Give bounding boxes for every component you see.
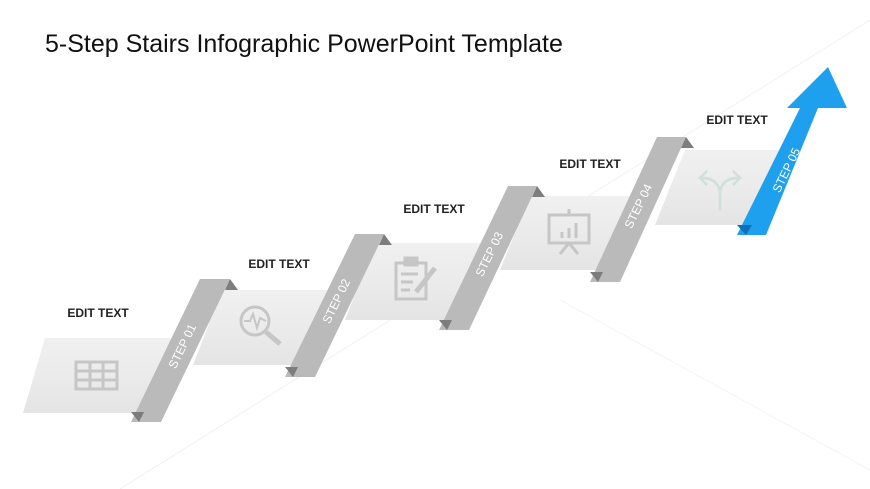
bar: step 02: STEP 02 xyxy=(320,276,353,326)
arrow: step 05: STEP 05 xyxy=(770,145,803,195)
label 3: EDIT TEXT xyxy=(403,202,465,216)
icon: magnifier xyxy=(241,307,280,344)
panel 2 xyxy=(193,290,345,365)
bar: step 02 xyxy=(285,234,392,377)
bar: step 04: STEP 04 xyxy=(622,181,655,231)
panel 1 xyxy=(23,338,185,413)
title: 5-Step Stairs Infographic PowerPoint Template xyxy=(45,30,563,58)
label 2: EDIT TEXT xyxy=(248,257,310,271)
icon: table xyxy=(76,362,117,389)
arrow: step 05 xyxy=(737,67,847,235)
bar: step 01 xyxy=(131,279,238,422)
bar: step 03 xyxy=(439,186,545,330)
label 5: EDIT TEXT xyxy=(706,113,768,127)
panel 3 xyxy=(345,243,495,320)
panel 4 xyxy=(500,196,645,270)
bar: step 04 xyxy=(590,137,694,282)
icon: clipboard xyxy=(396,258,435,299)
icon: split arrows xyxy=(700,171,740,210)
label 4: EDIT TEXT xyxy=(559,157,621,171)
bar: step 01: STEP 01 xyxy=(166,321,199,371)
icon: presentation xyxy=(549,209,589,254)
panel 5 xyxy=(655,150,795,225)
bar: step 03: STEP 03 xyxy=(473,229,506,279)
label 1: EDIT TEXT xyxy=(67,306,129,320)
